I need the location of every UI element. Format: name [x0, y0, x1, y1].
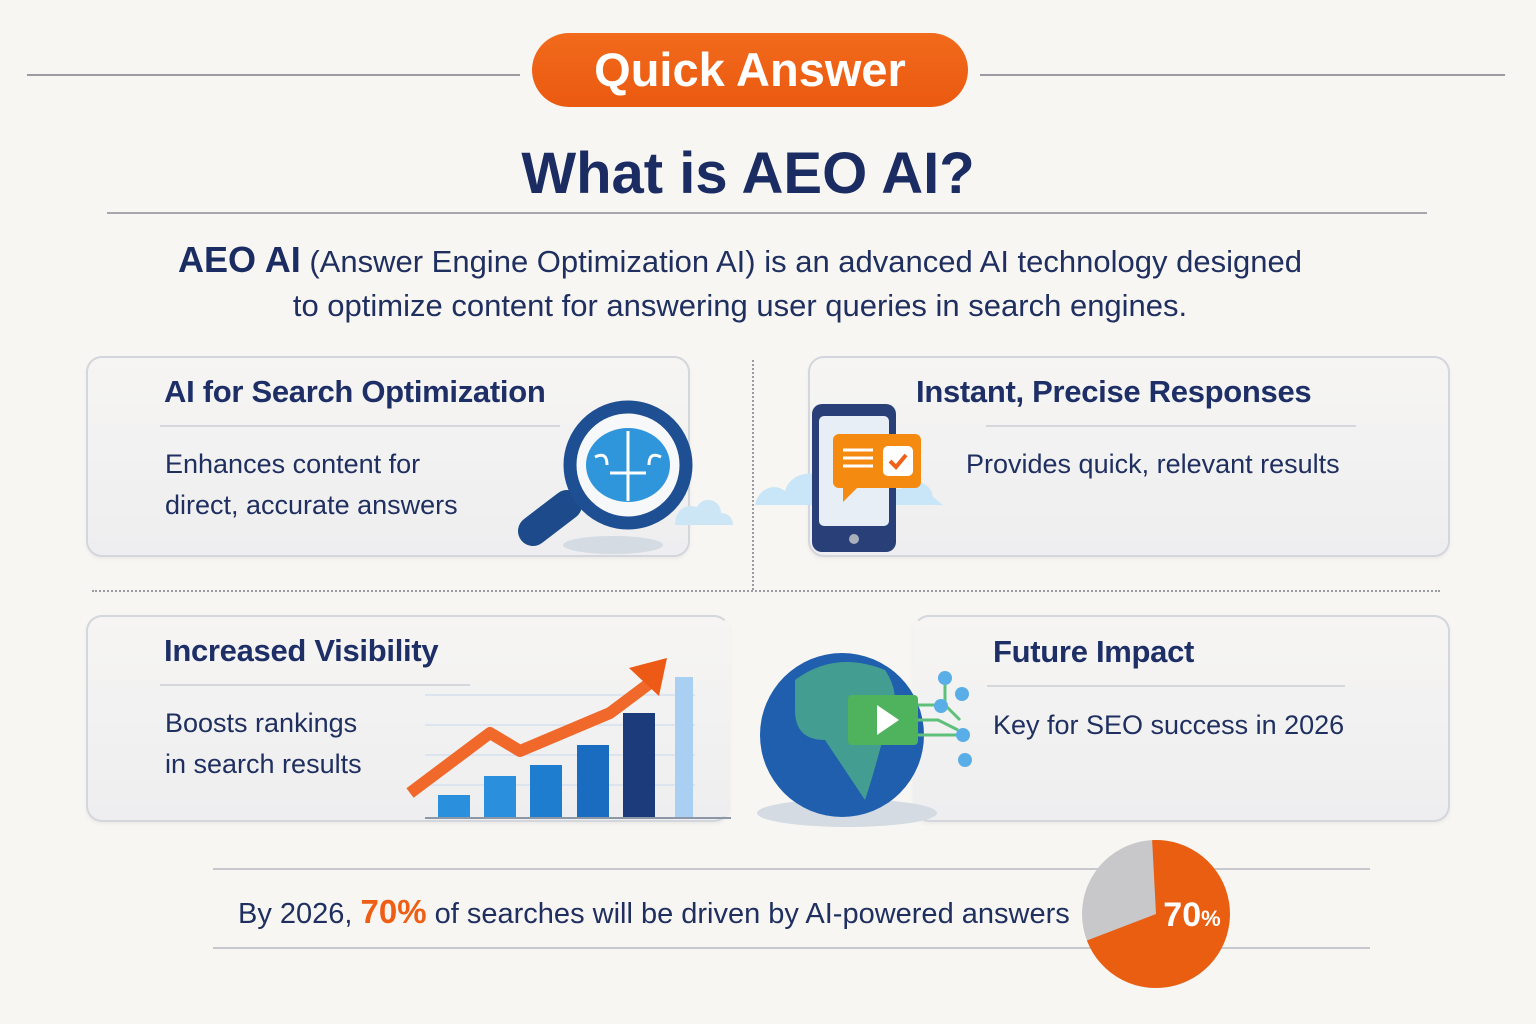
intro text: to optimize content for answering user queries in search engines.: [293, 288, 1187, 323]
panel: AI for Search Optimization: AI for Search Optimization: [164, 374, 545, 409]
panel: Increased Visibility: Boosts rankings: [165, 708, 357, 738]
panel: Instant, Precise Responses: [808, 356, 1450, 557]
panel: Instant, Precise Responses: Provides quick, relevant results: [966, 449, 1340, 479]
statistic text: By 2026, 70% of searches will be driven by AI-powered answers: [238, 893, 1070, 930]
panel: Increased Visibility: [86, 615, 730, 822]
panel: Increased Visibility: Increased Visibility: [164, 633, 438, 668]
badge: Quick Answer: [532, 33, 968, 107]
badge: Quick Answer: Quick Answer: [594, 43, 906, 96]
icon: magnifier with brain: [518, 400, 733, 554]
panel: Future Impact: [913, 615, 1450, 822]
bar chart with rising arrow: [406, 658, 731, 819]
pie chart 70%: 70%: [1163, 896, 1221, 934]
pie chart 70%: [1082, 840, 1230, 988]
panel: AI for Search Optimization: direct, accurate answers: [165, 490, 458, 520]
title: What is AEO AI?: [521, 141, 975, 206]
intro text: [178, 239, 1302, 323]
panel: Increased Visibility: in search results: [165, 749, 362, 779]
icon: phone with chat bubble: [755, 404, 943, 552]
icon: globe with network: [757, 653, 972, 827]
panel: Instant, Precise Responses: Instant, Precise Responses: [916, 374, 1311, 409]
panel: AI for Search Optimization: [86, 356, 690, 557]
intro text: AEO AI (Answer Engine Optimization AI) is an advanced AI technology designed: [178, 239, 1302, 280]
bottom lines: [213, 868, 1370, 870]
header lines: [27, 74, 520, 76]
panel: AI for Search Optimization: Enhances content for: [165, 449, 420, 479]
panel: Future Impact: Future Impact: [993, 634, 1194, 669]
panel: Future Impact: Key for SEO success in 2026: [993, 710, 1344, 740]
dividers: [752, 360, 754, 590]
